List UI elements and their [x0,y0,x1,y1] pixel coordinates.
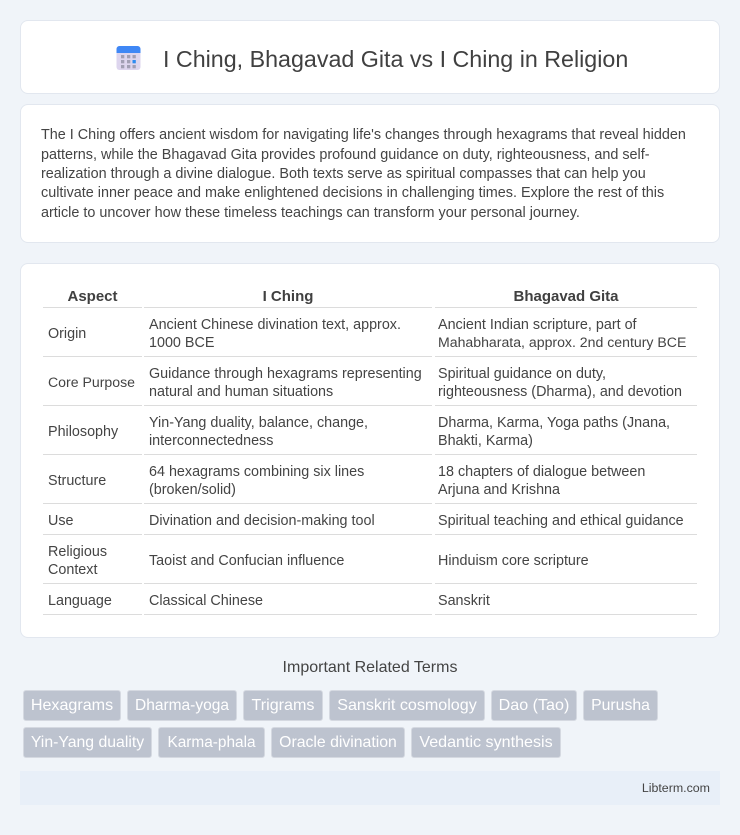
comparison table: Ancient Indian scripture, part of [438,317,637,333]
comparison table: 1000 BCE [149,335,214,351]
comparison table: Origin [48,326,86,342]
related term tags: Dharma-yoga [135,697,229,714]
intro text [41,127,686,221]
comparison table: Spiritual teaching and ethical guidance [438,513,684,529]
related term tags: Oracle divination [279,734,397,751]
comparison table: Religious [48,544,107,560]
intro text: realization through a divine dialogue. Both texts serve as spiritual compasses that can help you [41,166,646,182]
related term tags: Trigrams [252,696,314,714]
comparison table: Taoist and Confucian influence [149,553,344,569]
related term tags [23,690,658,758]
comparison table: 18 chapters of dialogue between [438,464,645,480]
comparison table: Ancient Chinese divination text, approx. [149,317,401,333]
title: I Ching, Bhagavad Gita vs I Ching in Religion [163,46,628,72]
comparison table: Use [48,513,74,529]
comparison table: Structure [48,473,106,489]
intro text: The I Ching offers ancient wisdom for navigating life's changes through hexagrams that reveal hidden [41,127,686,143]
related term tags: Hexagrams [31,696,113,714]
comparison table: Core Purpose [48,374,135,390]
intro card [20,104,720,243]
comparison table: Arjuna and Krishna [438,482,560,498]
intro text: cultivate inner peace and make enlightened decisions in challenging times. Explore the rest of this [41,185,664,201]
footer source: Libterm.com [642,781,710,795]
comparison table: righteousness (Dharma), and devotion [438,384,682,400]
header card [20,20,720,94]
comparison table: Mahabharata, approx. 2nd century BCE [438,334,686,350]
related term tags: Purusha [591,697,650,714]
footer bar [20,771,720,805]
comparison table: Sanskrit [438,593,490,609]
comparison table: interconnectedness [149,433,273,449]
comparison table: Spiritual guidance on duty, [438,366,606,382]
related term tags: Sanskrit cosmology [337,696,477,714]
intro text: patterns, while the Bhagavad Gita provides profound guidance on duty, righteousness, and self- [41,147,650,163]
icon: calendar [116,46,140,70]
related term tags: Dao (Tao) [499,696,569,714]
comparison table: Dharma, Karma, Yoga paths (Jnana, [438,415,670,431]
comparison table: Yin-Yang duality, balance, change, [149,415,368,431]
related terms heading: Important Related Terms [283,659,457,676]
comparison table: Language [48,593,112,609]
related term tags: Karma-phala [167,734,256,751]
comparison table: Guidance through hexagrams representing [149,366,422,382]
related term tags: Vedantic synthesis [419,733,553,751]
comparison table: Philosophy [48,424,118,440]
comparison table: natural and human situations [149,384,333,400]
table card [20,263,720,638]
comparison table: Divination and decision-making tool [149,513,375,529]
table header [67,288,619,305]
table header: Aspect [67,288,118,305]
table header: Bhagavad Gita [513,288,619,305]
comparison table: Bhakti, Karma) [438,433,533,449]
comparison table: Classical Chinese [149,593,263,609]
related term tags: Yin-Yang duality [31,734,144,751]
table header: I Ching [263,288,313,305]
comparison table: Hinduism core scripture [438,553,589,569]
comparison table: (broken/solid) [149,482,236,498]
intro text: article to uncover how these timeless teachings can transform your personal journey. [41,205,580,221]
comparison table [43,288,697,615]
comparison table: Context [48,562,97,578]
comparison table: 64 hexagrams combining six lines [149,464,364,480]
